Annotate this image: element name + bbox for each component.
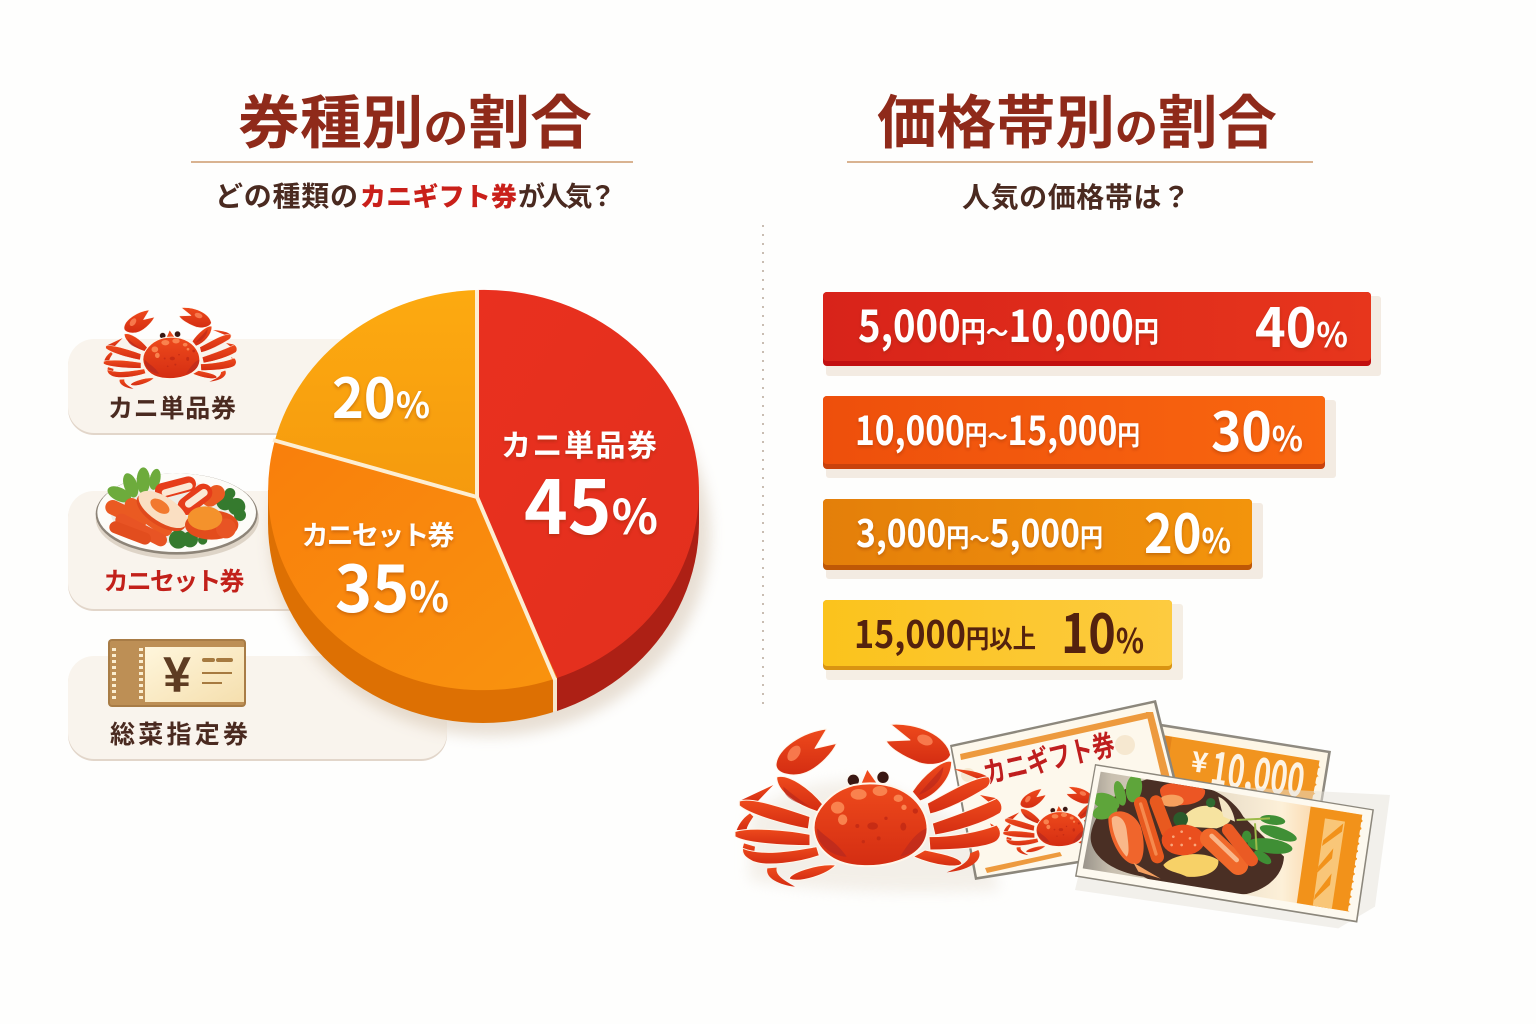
pie labels: 35%: [335, 539, 449, 631]
bar: 5,000-10,000 yen 40%: 5,000円～10,000円: [858, 291, 1159, 355]
voucher text: カニギフト券: [979, 722, 1119, 793]
label: gift voucher: 総菜指定券: [110, 715, 248, 751]
bar: 5,000-10,000 yen 40%: [823, 284, 1381, 376]
bar: 15,000 yen and above 10%: 15,000円以上: [854, 604, 1036, 659]
label: crab single: カニ単品券: [108, 389, 236, 425]
pie labels: 20%: [332, 354, 430, 434]
bar: 5,000-10,000 yen 40%: 40%: [1255, 284, 1348, 363]
small crab on voucher: [1003, 787, 1115, 855]
title: ticket type share: 券種別 の割合: [238, 76, 592, 160]
large crab: [735, 724, 1002, 887]
ticket: crab dish photo: [1075, 764, 1390, 928]
pie labels: カニセット券: [302, 514, 454, 553]
subtitle: left: どの種類の: [215, 175, 358, 215]
legend card: crab single: [68, 308, 368, 435]
bar: 3,000-5,000 yen 20%: 3,000円～5,000円: [856, 503, 1103, 558]
slice: crab single 45%: [477, 290, 699, 678]
pie chart: ticket types: [268, 290, 710, 736]
icon: yen ticket: [108, 639, 246, 707]
bar chart: price bands: [823, 284, 1381, 680]
right heading: [847, 76, 1313, 216]
bar: 3,000-5,000 yen 20%: 20%: [1144, 490, 1231, 569]
pie labels: [302, 354, 658, 631]
bar: 10,000-15,000 yen 30%: 30%: [1211, 388, 1303, 467]
bar: 10,000-15,000 yen 30%: 10,000円～15,000円: [855, 399, 1140, 457]
ticket: orange 10,000 yen: 10,000: [1207, 733, 1309, 810]
subtitle: left: カニギフト券: [360, 177, 517, 214]
icon: crab: [104, 308, 237, 389]
panel: legend: [68, 308, 447, 761]
bar: 15,000 yen and above 10%: 10%: [1061, 590, 1144, 669]
bar: 10,000-15,000 yen 30%: [823, 388, 1336, 478]
title: price band share: 価格帯別の割合: [877, 76, 1277, 160]
ticket: crab gift voucher: [950, 700, 1192, 880]
slice: crab set 35%: [268, 440, 557, 690]
legend card: gift voucher: [68, 639, 447, 761]
subtitle: right: 人気の価格帯は？: [962, 176, 1190, 216]
label: crab set: カニセット券: [104, 562, 244, 598]
ticket: orange 10,000 yen: ¥: [1189, 740, 1211, 782]
legend card: crab set: [68, 467, 368, 611]
slice: voucher 20%: [275, 290, 477, 497]
icon: crab plate: [96, 467, 259, 559]
crab ground shadow: [750, 780, 1000, 892]
ticket: orange 10,000 yen: [1140, 722, 1331, 830]
bar: 3,000-5,000 yen 20%: [823, 490, 1263, 579]
subtitle: left: が人気？: [518, 175, 616, 214]
left heading: [191, 76, 633, 215]
pie labels: カニ単品券: [501, 421, 657, 465]
ticket flat shadow: [1075, 780, 1390, 928]
bar: 15,000 yen and above 10%: [823, 590, 1183, 680]
icon: yen ticket: ¥: [163, 647, 191, 703]
subtitle: left: [215, 175, 616, 215]
illustration: crab and gift vouchers: [735, 700, 1390, 928]
pie labels: 45%: [524, 449, 658, 556]
